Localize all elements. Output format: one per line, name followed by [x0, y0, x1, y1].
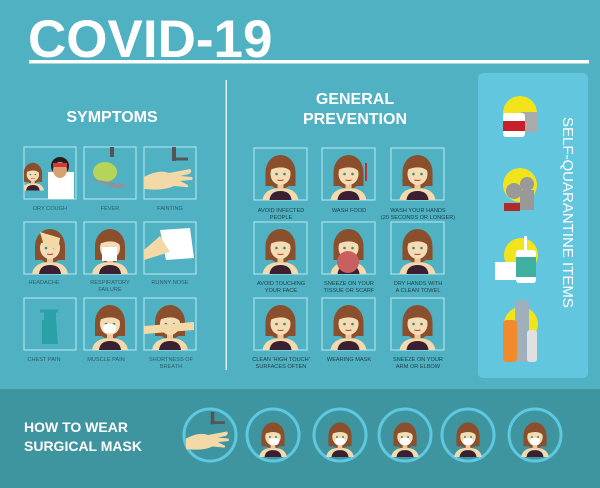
labels: prevention: PEOPLE [270, 215, 292, 221]
icon: headache [24, 222, 76, 274]
panel: general prevention: PREVENTION [303, 111, 407, 128]
icon: chest pain [24, 298, 76, 350]
labels: symptoms: DRY COUGH [33, 206, 67, 212]
labels: symptoms: RESPIRATORY [90, 280, 130, 286]
labels: prevention: SNEEZE ON YOUR [393, 357, 443, 363]
labels: symptoms [27, 206, 194, 370]
labels: prevention: AVOID TOUCHING [257, 281, 305, 287]
labels: prevention: WASH FOOD [332, 208, 366, 214]
icon: fever [84, 147, 136, 199]
heading: symptoms: SYMPTOMS [66, 109, 158, 126]
labels: symptoms: CHEST PAIN [27, 357, 61, 363]
labels: prevention: CLEAN 'HIGH TOUCH' [252, 357, 310, 363]
heading: how to wear: HOW TO WEAR [24, 419, 128, 435]
vertical label: SELF-QUARANTINE ITEMS [559, 117, 576, 308]
icon: medicine [503, 96, 537, 137]
icon: dry cough [22, 147, 76, 199]
labels: prevention: AVOID INFECTED [258, 208, 304, 214]
panel: how to wear surgical mask: SURGICAL MASK [24, 438, 142, 454]
icon: muscle pain [84, 298, 136, 350]
labels: symptoms: FEVER [101, 206, 119, 212]
labels: prevention: DRY HANDS WITH [394, 281, 442, 287]
labels: symptoms: BREATH [160, 364, 182, 370]
labels: prevention: WASH YOUR HANDS [390, 208, 446, 214]
labels: prevention [252, 208, 455, 370]
panel: how to wear surgical mask [0, 389, 600, 488]
labels: prevention: TISSUE OR SCARF [324, 288, 375, 294]
labels: prevention: WEARING MASK [327, 357, 371, 363]
labels: prevention: (20 SECONDS OR LONGER) [381, 215, 455, 221]
heading: general prevention: GENERAL [316, 91, 394, 108]
icon: water bottles [503, 300, 538, 362]
icon: canned food [503, 168, 537, 211]
labels: symptoms: MUSCLE PAIN [87, 357, 125, 363]
labels: symptoms: HEADACHE [28, 280, 60, 286]
steps: mask circles [184, 409, 561, 461]
icon: shortness of breath [144, 298, 196, 350]
panel: symptoms [22, 109, 196, 370]
icon: fainting [144, 147, 196, 199]
icon: respiratory failure [84, 222, 136, 274]
labels: symptoms: RUNNY NOSE [151, 280, 189, 286]
labels: prevention: ARM OR ELBOW [396, 364, 441, 370]
panel: general prevention [252, 91, 455, 370]
title [28, 10, 589, 69]
labels: prevention: SURFACES OFTEN [256, 364, 306, 370]
labels: symptoms: SHORTNESS OF [149, 357, 194, 363]
labels: symptoms: FAINTING [157, 206, 183, 212]
icon grid: prevention [254, 148, 444, 350]
labels: symptoms: FAILURE [98, 287, 122, 293]
labels: prevention: YOUR FACE [265, 288, 297, 294]
icon: sanitizer [495, 236, 538, 283]
labels: prevention: A CLEAN TOWEL [396, 288, 440, 294]
icon: runny nose [144, 222, 196, 274]
title: COVID-19 [28, 10, 272, 69]
labels: prevention: SNEEZE ON YOUR [324, 281, 374, 287]
panel: self-quarantine items [478, 73, 588, 378]
